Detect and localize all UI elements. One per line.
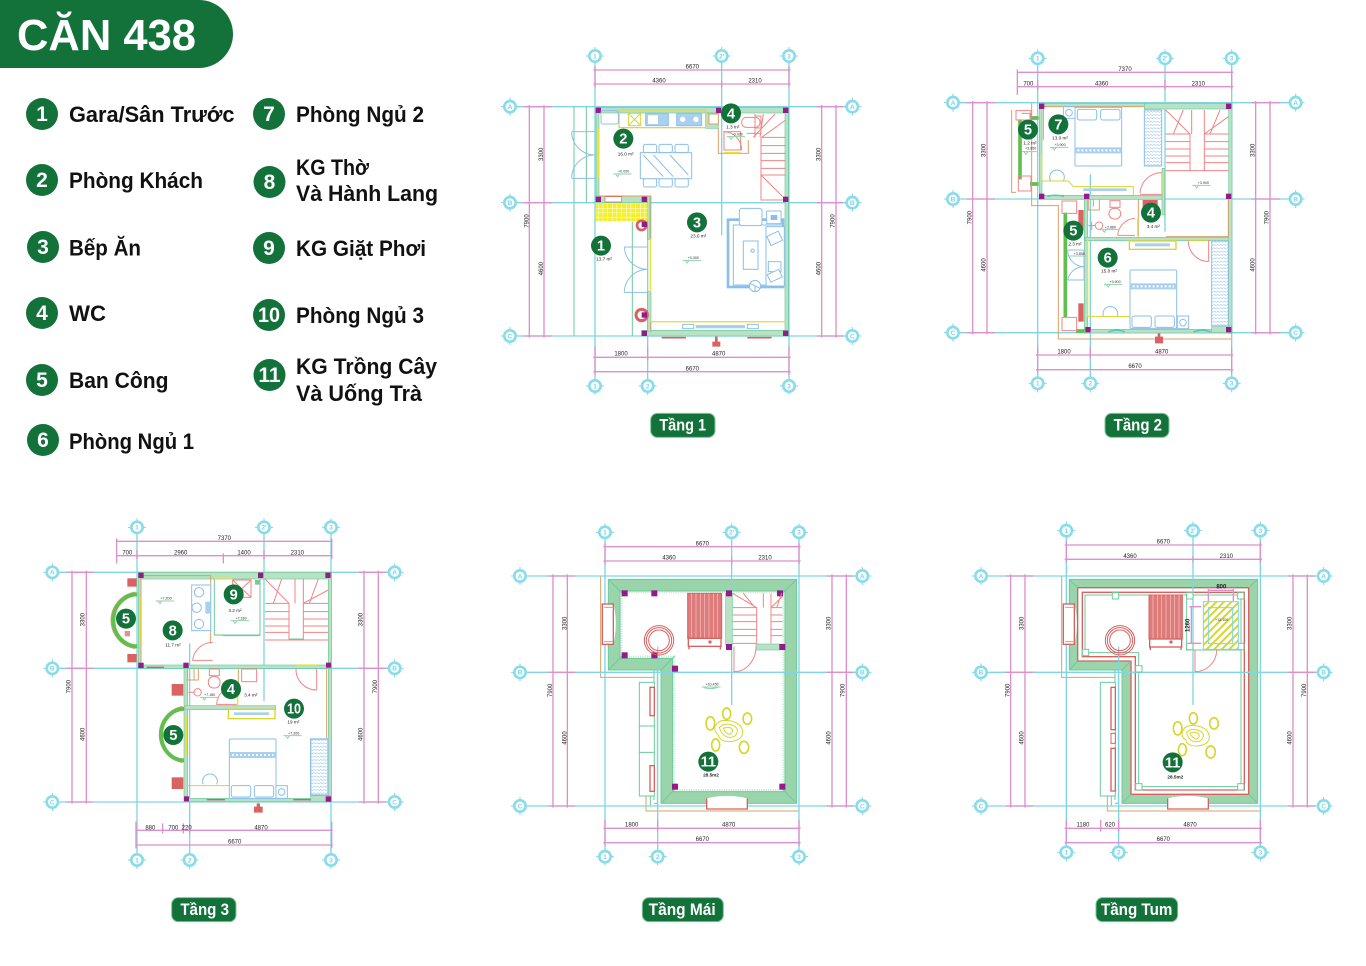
grid axes [981, 531, 1324, 852]
axis bubbles: C [508, 333, 513, 340]
dimension lines: 3300 [816, 147, 822, 161]
dimension lines: 7900 [967, 210, 973, 224]
floor label: Tầng 3: Tầng 3 [180, 901, 229, 919]
garden rocks [706, 708, 752, 753]
dimension lines: 2310 [291, 550, 305, 556]
level markers: +7.200 [288, 731, 299, 735]
axis bubbles: 2' [1162, 56, 1168, 63]
kitchen counter and appliances [601, 110, 706, 128]
dimension lines: 220 [182, 825, 192, 831]
grid axes [953, 58, 1296, 383]
dimension lines: 6670 [228, 840, 242, 846]
floor label: Tầng 1 [651, 413, 715, 437]
dimension lines: 3300 [982, 143, 988, 157]
outer tan outlines [1062, 576, 1260, 811]
room badge 10 [284, 699, 304, 724]
dimension lines: 7900 [841, 683, 847, 697]
axis bubbles: A [508, 104, 513, 111]
room badge 11: 11 [701, 755, 716, 771]
dimension lines: 1800 [625, 823, 639, 829]
walls and columns [1012, 103, 1232, 343]
axis bubbles: B [518, 670, 523, 677]
axis bubbles: 3 [797, 854, 801, 861]
floor label: Tầng 1: Tầng 1 [659, 417, 706, 435]
axis bubbles: B [1321, 670, 1326, 677]
floor plan: Tầng 2 [944, 49, 1305, 437]
room badge 4 [1141, 203, 1161, 229]
level markers: +3.850 [1025, 147, 1036, 151]
axis bubbles: C [951, 330, 956, 337]
axis bubbles: 3 [1230, 56, 1234, 63]
room badge 2: 16.0 m² [618, 151, 634, 156]
room badge 10: 10 [287, 702, 301, 718]
stairs [1166, 110, 1228, 171]
dimension lines: 700 [1023, 81, 1034, 87]
door [1195, 650, 1217, 672]
dimension lines: 6670 [696, 541, 710, 547]
dimension lines: 7900 [373, 679, 379, 693]
floor plan: Tầng Tum [972, 522, 1333, 922]
stairs [753, 114, 786, 200]
outer tan and green outlines [601, 576, 799, 811]
dining table and chairs [640, 144, 692, 187]
dimension lines [67, 536, 387, 848]
dimension lines [1005, 540, 1315, 846]
room badge 5 lower [163, 725, 183, 745]
dimension lines: 4600 [826, 731, 832, 745]
axis bubbles: 3 [329, 525, 333, 532]
room badge 4: 4 [1147, 206, 1156, 222]
dimension lines: 2960 [174, 550, 188, 556]
room badge 4: 4 [227, 682, 236, 698]
WC fixtures [709, 114, 761, 150]
legend item 9: KG Giặt Phơi [296, 236, 426, 261]
legend item 8: KG Thờ [296, 155, 369, 180]
dimension lines: 1800 [1057, 350, 1071, 356]
legend item 4: WC [69, 301, 106, 326]
legend item 2: Phòng Khách [69, 168, 203, 193]
pergola [1149, 595, 1182, 650]
dimension lines: 6670 [1128, 364, 1142, 370]
dimension lines: 3300 [539, 147, 545, 161]
living room furniture [683, 208, 784, 329]
dimension lines: 3300 [1020, 616, 1026, 630]
floor label: Tầng Mái [642, 898, 723, 922]
legend item 11: 11 [258, 364, 281, 387]
dimension lines: 3300 [563, 616, 569, 630]
roof band [608, 579, 799, 806]
dimension lines [548, 541, 853, 846]
axis bubbles: A [392, 570, 397, 577]
title banner [0, 0, 233, 68]
axis bubbles: 1 [593, 383, 597, 390]
dimension lines: 620 [1105, 823, 1116, 829]
room badge 3: 3 [693, 215, 701, 231]
room badge 8: 8 [169, 623, 177, 639]
axis bubbles: 2 [1117, 850, 1121, 857]
axis bubbles: 2' [729, 530, 735, 537]
dimension lines: 1400 [237, 550, 251, 556]
axis bubbles: B [860, 670, 865, 677]
dimension lines: 1180 [1077, 823, 1090, 829]
dimension lines: 4360 [1095, 81, 1109, 87]
axis bubbles: 2 [656, 854, 660, 861]
floor label: Tầng 3 [172, 898, 236, 922]
door [734, 647, 756, 672]
legend item 11: KG Trồng Cây [296, 354, 438, 379]
axis bubbles: B [508, 200, 513, 207]
room badge 1: 13.7 m² [596, 257, 612, 262]
floor plan: Tầng 3 [43, 518, 404, 922]
room badge 4 [221, 679, 258, 699]
room badge 5 upper: 5 [122, 612, 130, 628]
dimension lines: 2310 [748, 79, 762, 85]
dimension lines: 4360 [1123, 554, 1137, 560]
room badge 7: 7 [1054, 117, 1062, 133]
legend item 5: 5 [36, 369, 48, 392]
axis bubbles: 2 [646, 383, 650, 390]
floor label: Tầng 2 [1105, 413, 1169, 437]
grid axes [510, 56, 852, 386]
room badge 4 [721, 103, 741, 129]
room badge 5 lower: 2.3 m² [1068, 242, 1082, 247]
legend item 1: 1 [36, 103, 48, 126]
bedroom 1 furniture [1068, 240, 1228, 329]
axis bubbles: 1 [593, 53, 597, 60]
axis bubbles: A [1321, 573, 1326, 580]
room badge 5 upper: 1.2 m² [1023, 141, 1037, 146]
axis bubbles: 1 [1036, 56, 1040, 63]
dimension lines: 880 [145, 825, 156, 831]
room badge 3 [687, 212, 707, 239]
dimension lines: 4870 [722, 823, 736, 829]
dimension lines: 4870 [712, 352, 726, 358]
axis bubbles: 1 [603, 530, 607, 537]
room badge 10: 19 m² [287, 719, 300, 724]
dimension lines [967, 67, 1280, 373]
axis bubbles [972, 522, 1333, 861]
axis bubbles: B [392, 666, 397, 673]
room badge 6: 6 [1104, 251, 1112, 267]
axis bubbles: 3 [1258, 850, 1262, 857]
dimension lines: 7900 [1265, 210, 1271, 224]
axis bubbles: 2' [719, 53, 725, 60]
room badge 4: 3.4 m² [1147, 224, 1160, 229]
legend item 7: 7 [263, 103, 275, 126]
dimension lines: 4600 [359, 727, 365, 741]
legend item 10: Phòng Ngủ 3 [296, 303, 424, 328]
axis bubbles [511, 523, 871, 866]
inner walls and columns [622, 590, 785, 790]
dimension lines: 6670 [1157, 837, 1171, 843]
dimension lines: 4870 [1155, 350, 1169, 356]
level markers: +7.200 [160, 597, 172, 601]
level markers: -0.020 [732, 132, 743, 136]
room badge 6: 15.0 m² [1101, 268, 1117, 273]
room badge 5 lower [1063, 221, 1083, 247]
axis bubbles: A [860, 573, 865, 580]
walls and columns [111, 572, 332, 813]
room badge 5 upper [1018, 120, 1038, 146]
legend item 3: 3 [37, 236, 49, 259]
dimension lines: 4360 [652, 79, 666, 85]
axis bubbles: A [979, 573, 984, 580]
dimension lines: 2310 [1192, 81, 1206, 87]
room badge 6 [1098, 248, 1118, 273]
dimension lines: 2310 [1220, 554, 1234, 560]
garden rocks [1173, 713, 1218, 758]
WC 2 fixtures [1088, 199, 1135, 235]
legend item 1 [26, 98, 234, 130]
room badge 11 [698, 752, 719, 778]
level markers [156, 597, 302, 738]
room badge 5 upper: 5 [1024, 123, 1032, 139]
room badge 9 [224, 584, 244, 613]
dimension lines: 3300 [826, 616, 832, 630]
doors [572, 132, 648, 292]
dimension lines: 6670 [1157, 540, 1171, 546]
room badge 11: 28.5m2 [703, 773, 719, 778]
round stair well [1105, 626, 1135, 655]
axis bubbles: 1 [1064, 528, 1068, 535]
axis bubbles: C [860, 803, 865, 810]
dimension lines: 4360 [662, 556, 676, 562]
axis bubbles: 1 [135, 857, 139, 864]
axis bubbles: 2' [261, 525, 267, 532]
axis bubbles: A [50, 570, 55, 577]
level markers: +0.000 [688, 256, 699, 260]
dimension lines: 4600 [1287, 731, 1293, 745]
legend item 1: Gara/Sân Trước [69, 102, 234, 127]
dimension lines: 4600 [1250, 258, 1256, 272]
axis bubbles: 1 [1036, 381, 1040, 388]
dimension lines: 7900 [548, 683, 554, 697]
dimension lines: 2310 [758, 556, 772, 562]
axis bubbles: 3 [1230, 381, 1234, 388]
room badge 7: 13.0 m² [1052, 135, 1068, 140]
axis bubbles: A [518, 573, 523, 580]
legend item 4: 4 [36, 302, 48, 325]
legend item 7 [253, 98, 424, 130]
stairs [733, 593, 782, 643]
axis bubbles: C [50, 799, 55, 806]
dimension lines: 4600 [81, 727, 87, 741]
legend item 6 [27, 424, 194, 456]
level markers: +7.180 [235, 616, 247, 620]
level markers: +3.850 [1074, 252, 1085, 256]
axis bubbles: A [1293, 100, 1298, 107]
dimension lines: 4600 [1020, 731, 1026, 745]
axis bubbles: 2 [1088, 381, 1092, 388]
axis bubbles: 3 [787, 383, 791, 390]
bedroom 3 furniture [188, 709, 328, 798]
axis bubbles: C [850, 333, 855, 340]
level marker [702, 683, 721, 689]
room badge 5 lower: 5 [169, 728, 177, 744]
walls and columns [574, 107, 788, 347]
room badge 2: 2 [619, 132, 627, 148]
axis bubbles: C [979, 803, 984, 810]
legend item 5 [26, 364, 168, 396]
axis bubbles: 2 [188, 857, 192, 864]
axis bubbles: 3 [797, 530, 801, 537]
dimension lines: 4600 [539, 261, 545, 275]
title banner: CĂN 438 [17, 10, 196, 60]
axis bubbles: B [951, 196, 956, 203]
room badge 8 [163, 620, 183, 648]
room badge 11: 11 [1165, 755, 1180, 771]
dimension lines: 7900 [831, 214, 837, 228]
level markers: +3.880 [1105, 225, 1116, 229]
dimension lines: 7900 [1302, 683, 1308, 697]
level markers [613, 132, 745, 263]
legend item 8 [254, 155, 438, 206]
legend item 10: 10 [258, 304, 280, 327]
level markers: +3.900 [1109, 280, 1121, 284]
balconies [1063, 604, 1208, 809]
dimension lines: 7900 [67, 679, 73, 693]
legend item 8: 8 [264, 171, 276, 194]
floor label: Tầng Tum: Tầng Tum [1101, 901, 1172, 919]
axis bubbles: 1 [603, 854, 607, 861]
room badge 11: 28.5m2 [1167, 774, 1184, 779]
axis bubbles: C [392, 799, 397, 806]
axis bubbles: B [850, 200, 855, 207]
dimension lines: 700 [122, 550, 133, 556]
axis bubbles: C [518, 803, 523, 810]
dimension lines: 1800 [614, 352, 628, 358]
level markers: +7.180 [204, 693, 215, 697]
axis bubbles: 1 [1064, 850, 1068, 857]
dimension lines: 4870 [254, 825, 268, 831]
round stair well [644, 626, 674, 655]
legend item 9: 9 [263, 237, 275, 260]
dimension lines: 4600 [982, 258, 988, 272]
room badge 1: 1 [597, 239, 605, 255]
axis bubbles: 1 [135, 525, 139, 532]
water tank hatch: 800 [1216, 584, 1227, 590]
level markers: +0.000 [618, 170, 629, 174]
axis bubbles: 2' [1190, 528, 1196, 535]
bedroom 2 furniture [1042, 107, 1162, 195]
room badge 1 [591, 236, 612, 262]
dimension lines: 4600 [816, 261, 822, 275]
axis bubbles: 3 [329, 857, 333, 864]
room badge 4: 1.3 m² [726, 124, 740, 129]
dimension lines: 4600 [563, 731, 569, 745]
legend item 9 [253, 232, 426, 264]
level markers: +3.900 [1054, 143, 1066, 147]
dimension lines: 3300 [81, 612, 87, 626]
axis bubbles [944, 49, 1305, 392]
dimension lines: 3300 [359, 612, 365, 626]
legend item 2 [26, 164, 203, 196]
room badge 4: 3.4 m² [244, 693, 258, 698]
dimension lines: 3300 [1250, 143, 1256, 157]
legend item 5: Ban Công [69, 368, 168, 393]
grid axes [520, 532, 862, 857]
floor label: Tầng 2: Tầng 2 [1114, 417, 1162, 435]
level marker: +10.450 [705, 683, 719, 687]
water tank hatch [1185, 584, 1238, 649]
legend item 2: 2 [36, 169, 48, 192]
balconies [602, 604, 747, 809]
altar and laundry fixtures [192, 580, 317, 690]
axis bubbles: B [979, 670, 984, 677]
columns [1082, 593, 1244, 790]
dimension lines: 7370 [218, 536, 232, 542]
roof band [1069, 579, 1260, 806]
dimension lines: 700 [168, 825, 179, 831]
floor plan: Tầng 1 [501, 47, 861, 437]
stairs [265, 579, 328, 640]
axis bubbles: B [50, 666, 55, 673]
axis bubbles: B [1293, 196, 1298, 203]
dimension lines: 7900 [1005, 683, 1011, 697]
axis bubbles: 3 [1258, 528, 1262, 535]
room badge 7 [1048, 114, 1068, 140]
room badge 5 upper [116, 609, 136, 629]
legend item 4 [26, 297, 106, 329]
room badge 2 [613, 129, 634, 156]
legend item 3: Bếp Ăn [69, 236, 141, 260]
axis bubbles [43, 518, 404, 869]
dimension lines: 4870 [1183, 823, 1197, 829]
legend item 8: Và Hành Lang [296, 181, 438, 206]
pergola [688, 593, 722, 649]
room badge 5 lower: 5 [1069, 224, 1077, 240]
legend item 11: Và Uống Trà [296, 381, 423, 406]
dimension lines: 7900 [525, 214, 531, 228]
legend item 6: 6 [37, 429, 49, 452]
water tank hatch: +13.100 [1215, 618, 1228, 622]
room badge 3: 23.0 m² [690, 234, 707, 239]
axis bubbles [501, 47, 861, 395]
legend item 3 [27, 231, 141, 263]
floor plan: Tầng Mái [511, 523, 871, 922]
grid axes [52, 527, 395, 860]
dimension lines: 6670 [686, 366, 700, 372]
legend item 6: Phòng Ngủ 1 [69, 429, 194, 454]
legend [26, 98, 438, 456]
dimension lines [523, 65, 843, 375]
dimension lines: 7370 [1118, 67, 1132, 73]
room badge 9: 3.2 m² [228, 608, 242, 613]
dimension lines: 3300 [1287, 616, 1293, 630]
room badge 9: 9 [230, 587, 238, 603]
dimension lines: 6670 [696, 837, 710, 843]
floor label: Tầng Mái: Tầng Mái [649, 901, 716, 919]
axis bubbles: C [1321, 803, 1326, 810]
axis bubbles: A [850, 104, 855, 111]
room badge 11 [1163, 752, 1184, 779]
axis bubbles: 3 [787, 53, 791, 60]
legend item 11 [254, 354, 438, 406]
WC 3 fixtures [188, 668, 257, 704]
room badge 8: 11.7 m² [165, 643, 181, 648]
axis bubbles: C [1293, 330, 1298, 337]
room badge 4: 4 [727, 106, 736, 122]
level markers [1022, 143, 1211, 287]
legend item 10 [253, 299, 424, 331]
water tank hatch: 1260 [1185, 618, 1191, 632]
axis bubbles: A [951, 100, 956, 107]
dimension lines: 6670 [686, 65, 700, 71]
level markers: +3.900 [1198, 181, 1209, 185]
legend item 7: Phòng Ngủ 2 [296, 102, 424, 127]
